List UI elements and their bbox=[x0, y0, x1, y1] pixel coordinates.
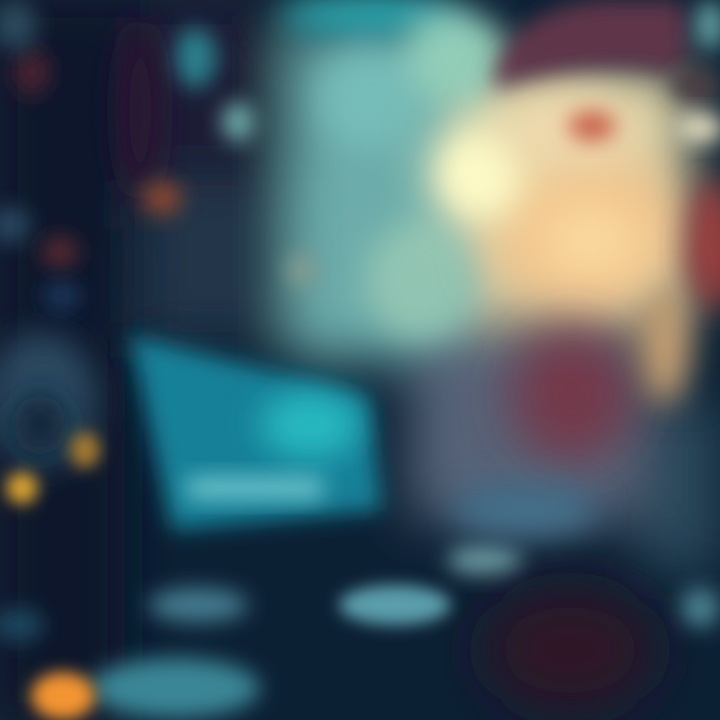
upper left blue bbox=[0, 0, 37, 50]
figure at upper right bbox=[495, 0, 720, 463]
screen highlight bbox=[260, 391, 360, 459]
screen text smudge bbox=[185, 476, 325, 500]
left blue spot bbox=[0, 207, 30, 243]
pill far right bbox=[680, 588, 720, 628]
teal leaf bbox=[173, 28, 217, 88]
yellow glow bbox=[432, 122, 524, 222]
pill upper right bbox=[450, 482, 600, 538]
amber dot right bbox=[70, 432, 100, 468]
screen panel bbox=[130, 335, 382, 530]
bottom pills bbox=[0, 482, 720, 720]
tan dot bbox=[288, 254, 316, 286]
maroon upper left bbox=[14, 48, 50, 96]
pale leaf bbox=[222, 102, 254, 142]
orange lamp bbox=[31, 672, 95, 720]
orange dot bbox=[142, 181, 182, 215]
teal pill bottom bbox=[90, 658, 260, 718]
orange haze bbox=[490, 150, 680, 310]
cream face area bbox=[500, 85, 640, 165]
blue dot bbox=[44, 282, 80, 310]
top right corner bbox=[694, 0, 720, 50]
dark right of hat bbox=[671, 69, 719, 101]
pill middle bbox=[339, 585, 451, 625]
yellow core bbox=[446, 141, 510, 209]
pale orange highlight bbox=[535, 200, 645, 280]
bottom right maroon bbox=[485, 588, 655, 712]
left dial bbox=[0, 332, 97, 468]
teal sky at top bbox=[280, 0, 505, 340]
tan glow bbox=[639, 285, 691, 405]
screen bbox=[130, 335, 382, 530]
hat bbox=[495, 0, 688, 90]
pill centre right bbox=[447, 545, 523, 575]
warm glow bbox=[432, 85, 680, 310]
dial centre bbox=[14, 395, 66, 455]
pill left bbox=[148, 588, 248, 622]
red dot bbox=[42, 236, 78, 268]
pill far left bbox=[0, 609, 44, 641]
white highlight bbox=[676, 114, 720, 142]
maroon stripe bbox=[118, 20, 162, 200]
red edge on right bbox=[688, 180, 720, 310]
amber dot left bbox=[6, 472, 38, 504]
left details bbox=[0, 0, 316, 504]
red spot bbox=[568, 111, 616, 141]
maroon body bbox=[510, 327, 634, 463]
